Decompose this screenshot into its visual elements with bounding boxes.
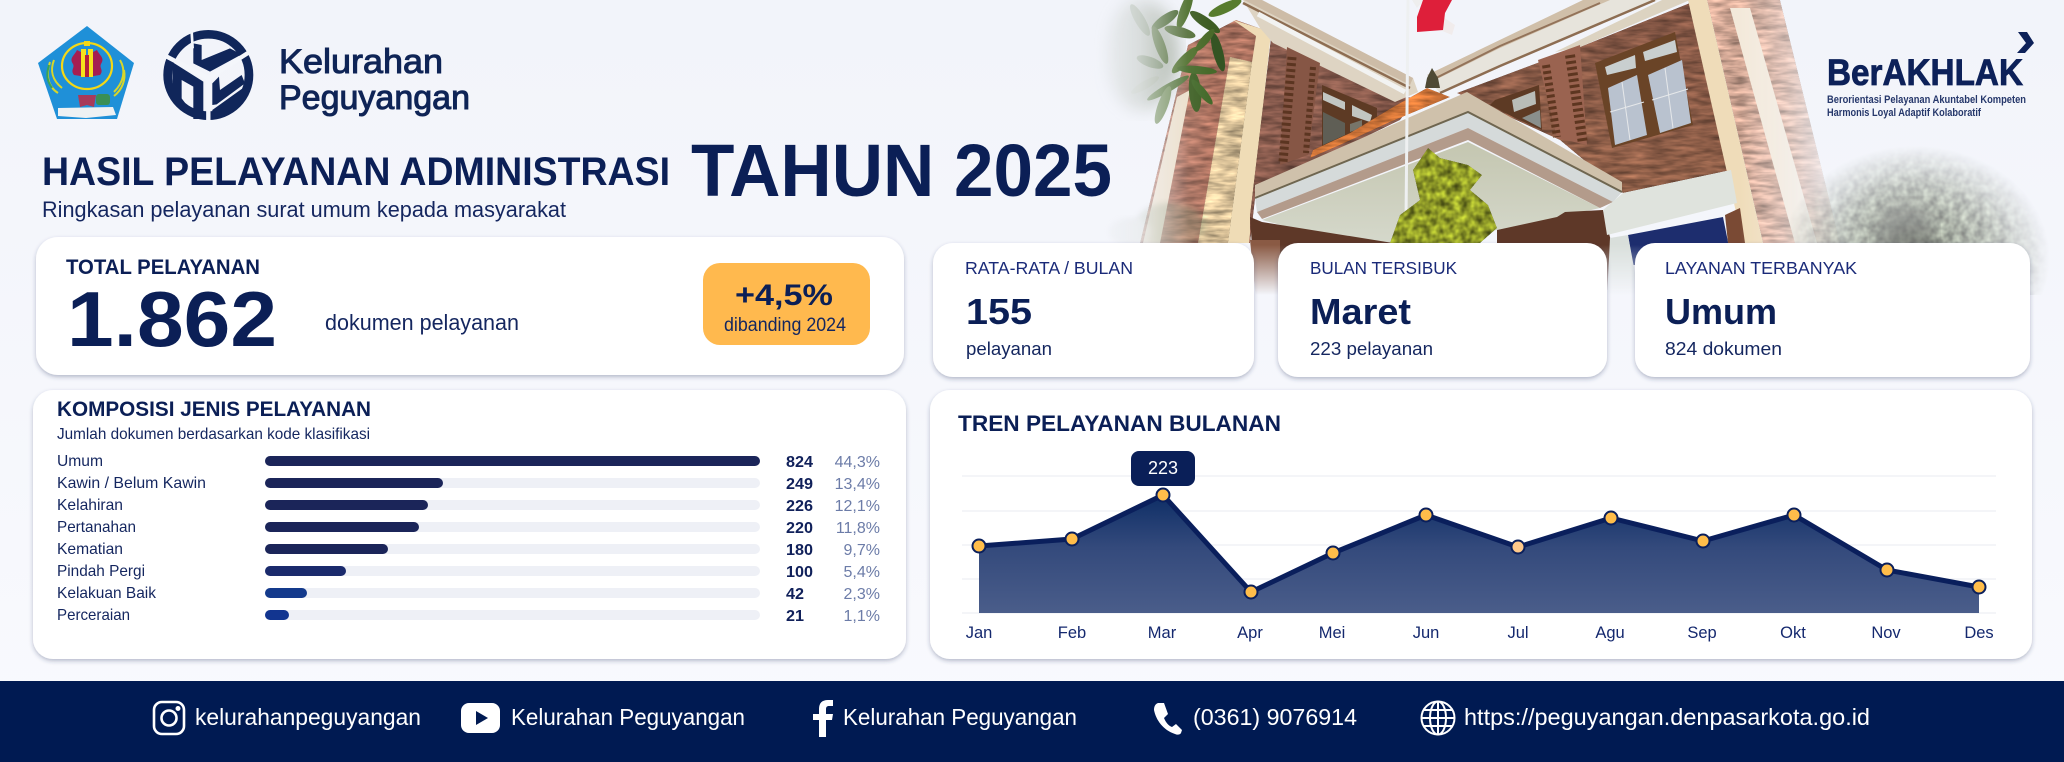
unit: dokumen pelayanan (325, 310, 519, 335)
brick under canopy (1250, 210, 1612, 290)
logo text: Peguyangan (279, 79, 470, 117)
row: kematian: 9,7% (844, 542, 880, 559)
panel: rata-rata per bulan (933, 243, 1254, 377)
month axis labels: Des (1964, 624, 1994, 642)
row: kelakuan baik (57, 585, 880, 603)
roof ornament (1425, 68, 1440, 88)
panel: bulan tersibuk: 223 pelayanan (1310, 339, 1433, 359)
left eave (1243, 0, 1418, 102)
badge: growth: +4,5% (735, 279, 833, 312)
lower brick wall strip (1250, 240, 1280, 293)
month axis labels: Feb (1058, 624, 1086, 642)
heading year: TAHUN 2025 (691, 129, 1112, 212)
row: kawin: 13,4% (835, 476, 880, 493)
month axis labels: Jan (966, 624, 992, 642)
heading: TREN PELAYANAN BULANAN (958, 411, 1281, 436)
logo text (279, 43, 470, 117)
row: pertanahan: Pertanahan (57, 519, 136, 536)
left window (1322, 85, 1377, 150)
data points (972, 488, 1986, 598)
row: kawin (57, 475, 880, 493)
row: pindah pergi: 100 (786, 564, 813, 581)
right outer brick (1707, 0, 1840, 243)
row: umum: 824 (786, 454, 813, 471)
panel: komposisi jenis pelayanan (33, 390, 906, 659)
badge: growth: dibanding 2024 (724, 315, 846, 336)
icon: globe (1422, 702, 1454, 734)
panel: bulan tersibuk: BULAN TERSIBUK (1310, 258, 1457, 278)
callout: peak value (1131, 451, 1195, 486)
row: umum: 44,3% (835, 454, 880, 471)
row: kelahiran (57, 497, 880, 515)
contact: phone number: (0361) 9076914 (1193, 704, 1357, 730)
row: kelakuan baik: 42 (786, 586, 804, 603)
row: pertanahan: 11,8% (836, 520, 880, 537)
badge: growth (703, 263, 870, 345)
row: kelahiran: 12,1% (835, 498, 880, 515)
month axis labels: Nov (1871, 624, 1901, 642)
row: perceraian: 21 (786, 608, 804, 625)
contact: youtube channel: Kelurahan Peguyangan (511, 704, 745, 730)
right cream strip (1730, 8, 1817, 243)
heading: KOMPOSISI JENIS PELAYANAN (57, 398, 371, 421)
panel: layanan terbanyak: 824 dokumen (1665, 339, 1782, 359)
row: pertanahan (57, 519, 880, 537)
month axis labels (966, 624, 1994, 642)
logo: BerAKHLAK: Berorientasi Pelayanan Akuntabel Kompeten (1827, 94, 2026, 106)
title block (42, 129, 1112, 222)
row: perceraian (57, 607, 880, 625)
lower wall (1608, 235, 1635, 290)
month axis labels: Jun (1413, 624, 1439, 642)
foliage top left (1102, 0, 1243, 126)
row: perceraian: 1,1% (844, 608, 880, 625)
contact: facebook page: Kelurahan Peguyangan (843, 704, 1077, 730)
right large window (1595, 32, 1693, 148)
panel: rata-rata per bulan: RATA-RATA / BULAN (965, 258, 1133, 278)
month axis labels: Okt (1780, 624, 1806, 642)
row: kelakuan baik: 2,3% (844, 586, 880, 603)
carved panel (1198, 57, 1252, 243)
month axis labels: Mei (1319, 624, 1345, 642)
footer bar (0, 681, 2064, 762)
logo: BerAKHLAK (1827, 32, 2034, 119)
trend line (979, 495, 1979, 592)
row: pindah pergi: Pindah Pergi (57, 563, 145, 580)
heading: HASIL PELAYANAN ADMINISTRASI (42, 150, 670, 194)
panel: rata-rata per bulan: pelayanan (966, 339, 1052, 359)
right cream pilaster (1688, 0, 1763, 243)
flag (1412, 0, 1455, 35)
row: pindah pergi: 5,4% (844, 564, 880, 581)
right stepped brick pillar (1538, 45, 1587, 145)
row: pertanahan: 220 (786, 520, 813, 537)
row: kawin: 249 (786, 476, 813, 493)
month axis labels: Agu (1595, 624, 1625, 642)
panel: tren pelayanan bulanan (930, 390, 2032, 659)
row: umum (57, 453, 880, 471)
panel: layanan terbanyak (1635, 243, 2030, 377)
panel: rata-rata per bulan: 155 (966, 291, 1032, 332)
row: umum: Umum (57, 453, 103, 470)
left cream pilaster (1198, 20, 1271, 243)
logo: BerAKHLAK: Harmonis Loyal Adaptif Kolaboratif (1827, 107, 1981, 119)
tile roof ridge (1310, 88, 1450, 158)
big number: 1.862 (67, 275, 277, 363)
month axis labels: Sep (1687, 624, 1717, 642)
panel: bulan tersibuk: Maret (1310, 291, 1411, 332)
area chart (979, 495, 1979, 613)
callout: peak value: 223 (1148, 458, 1178, 478)
month axis labels: Jul (1507, 624, 1529, 642)
left stepped brick pillar (1280, 47, 1320, 165)
panel: layanan terbanyak: LAYANAN TERBANYAK (1665, 258, 1857, 278)
panel: bulan tersibuk (1278, 243, 1607, 377)
foliage right (1789, 151, 2044, 295)
subtitle: Ringkasan pelayanan surat umum kepada masyarakat (42, 197, 566, 222)
white beam (1603, 170, 1737, 235)
panel: total pelayanan (36, 237, 904, 375)
subheading: Jumlah dokumen berdasarkan kode klasifikasi (57, 426, 370, 443)
row: kelahiran: Kelahiran (57, 497, 123, 514)
right eave (1427, 0, 1690, 93)
contact: website: https://peguyangan.denpasarkota.go.id (1464, 704, 1870, 730)
left cream strip (1143, 90, 1190, 243)
month axis labels: Apr (1237, 624, 1263, 642)
month axis labels: Mar (1148, 624, 1177, 642)
canopy (1255, 92, 1622, 243)
row: kelahiran: 226 (786, 498, 813, 515)
row: kawin: Kawin / Belum Kawin (57, 475, 206, 492)
left outer brick wall (1140, 20, 1270, 243)
row: pindah pergi (57, 563, 880, 581)
logo: kelurahan peguyangan mark (165, 32, 249, 122)
contact: instagram handle: kelurahanpeguyangan (195, 704, 421, 730)
central left brick wall (1250, 38, 1415, 243)
icon: phone (1154, 703, 1182, 735)
emblem: kota denpasar (38, 26, 134, 119)
row: kematian: 180 (786, 542, 813, 559)
row: perceraian: Perceraian (57, 607, 130, 624)
row: kematian: Kematian (57, 541, 123, 558)
icon: youtube (461, 703, 500, 733)
flag pole (1406, 0, 1408, 222)
right wall brick (1457, 3, 1731, 193)
foliage bottom left (1128, 202, 1207, 243)
conifer shrub (1390, 148, 1497, 243)
logo text: Kelurahan (279, 43, 443, 81)
header logos (38, 26, 470, 122)
row: kelakuan baik: Kelakuan Baik (57, 585, 157, 602)
label: TOTAL PELAYANAN (66, 256, 260, 279)
row: kematian (57, 541, 880, 559)
icon: instagram (154, 702, 184, 734)
logo: BerAKHLAK: BerAKHLAK (1827, 52, 2023, 93)
photo: kantor kelurahan building (1102, 0, 1840, 300)
icon: facebook (813, 700, 833, 737)
panel: layanan terbanyak: Umum (1665, 291, 1777, 332)
blue sign (1628, 217, 1728, 265)
right small window (1490, 85, 1542, 130)
